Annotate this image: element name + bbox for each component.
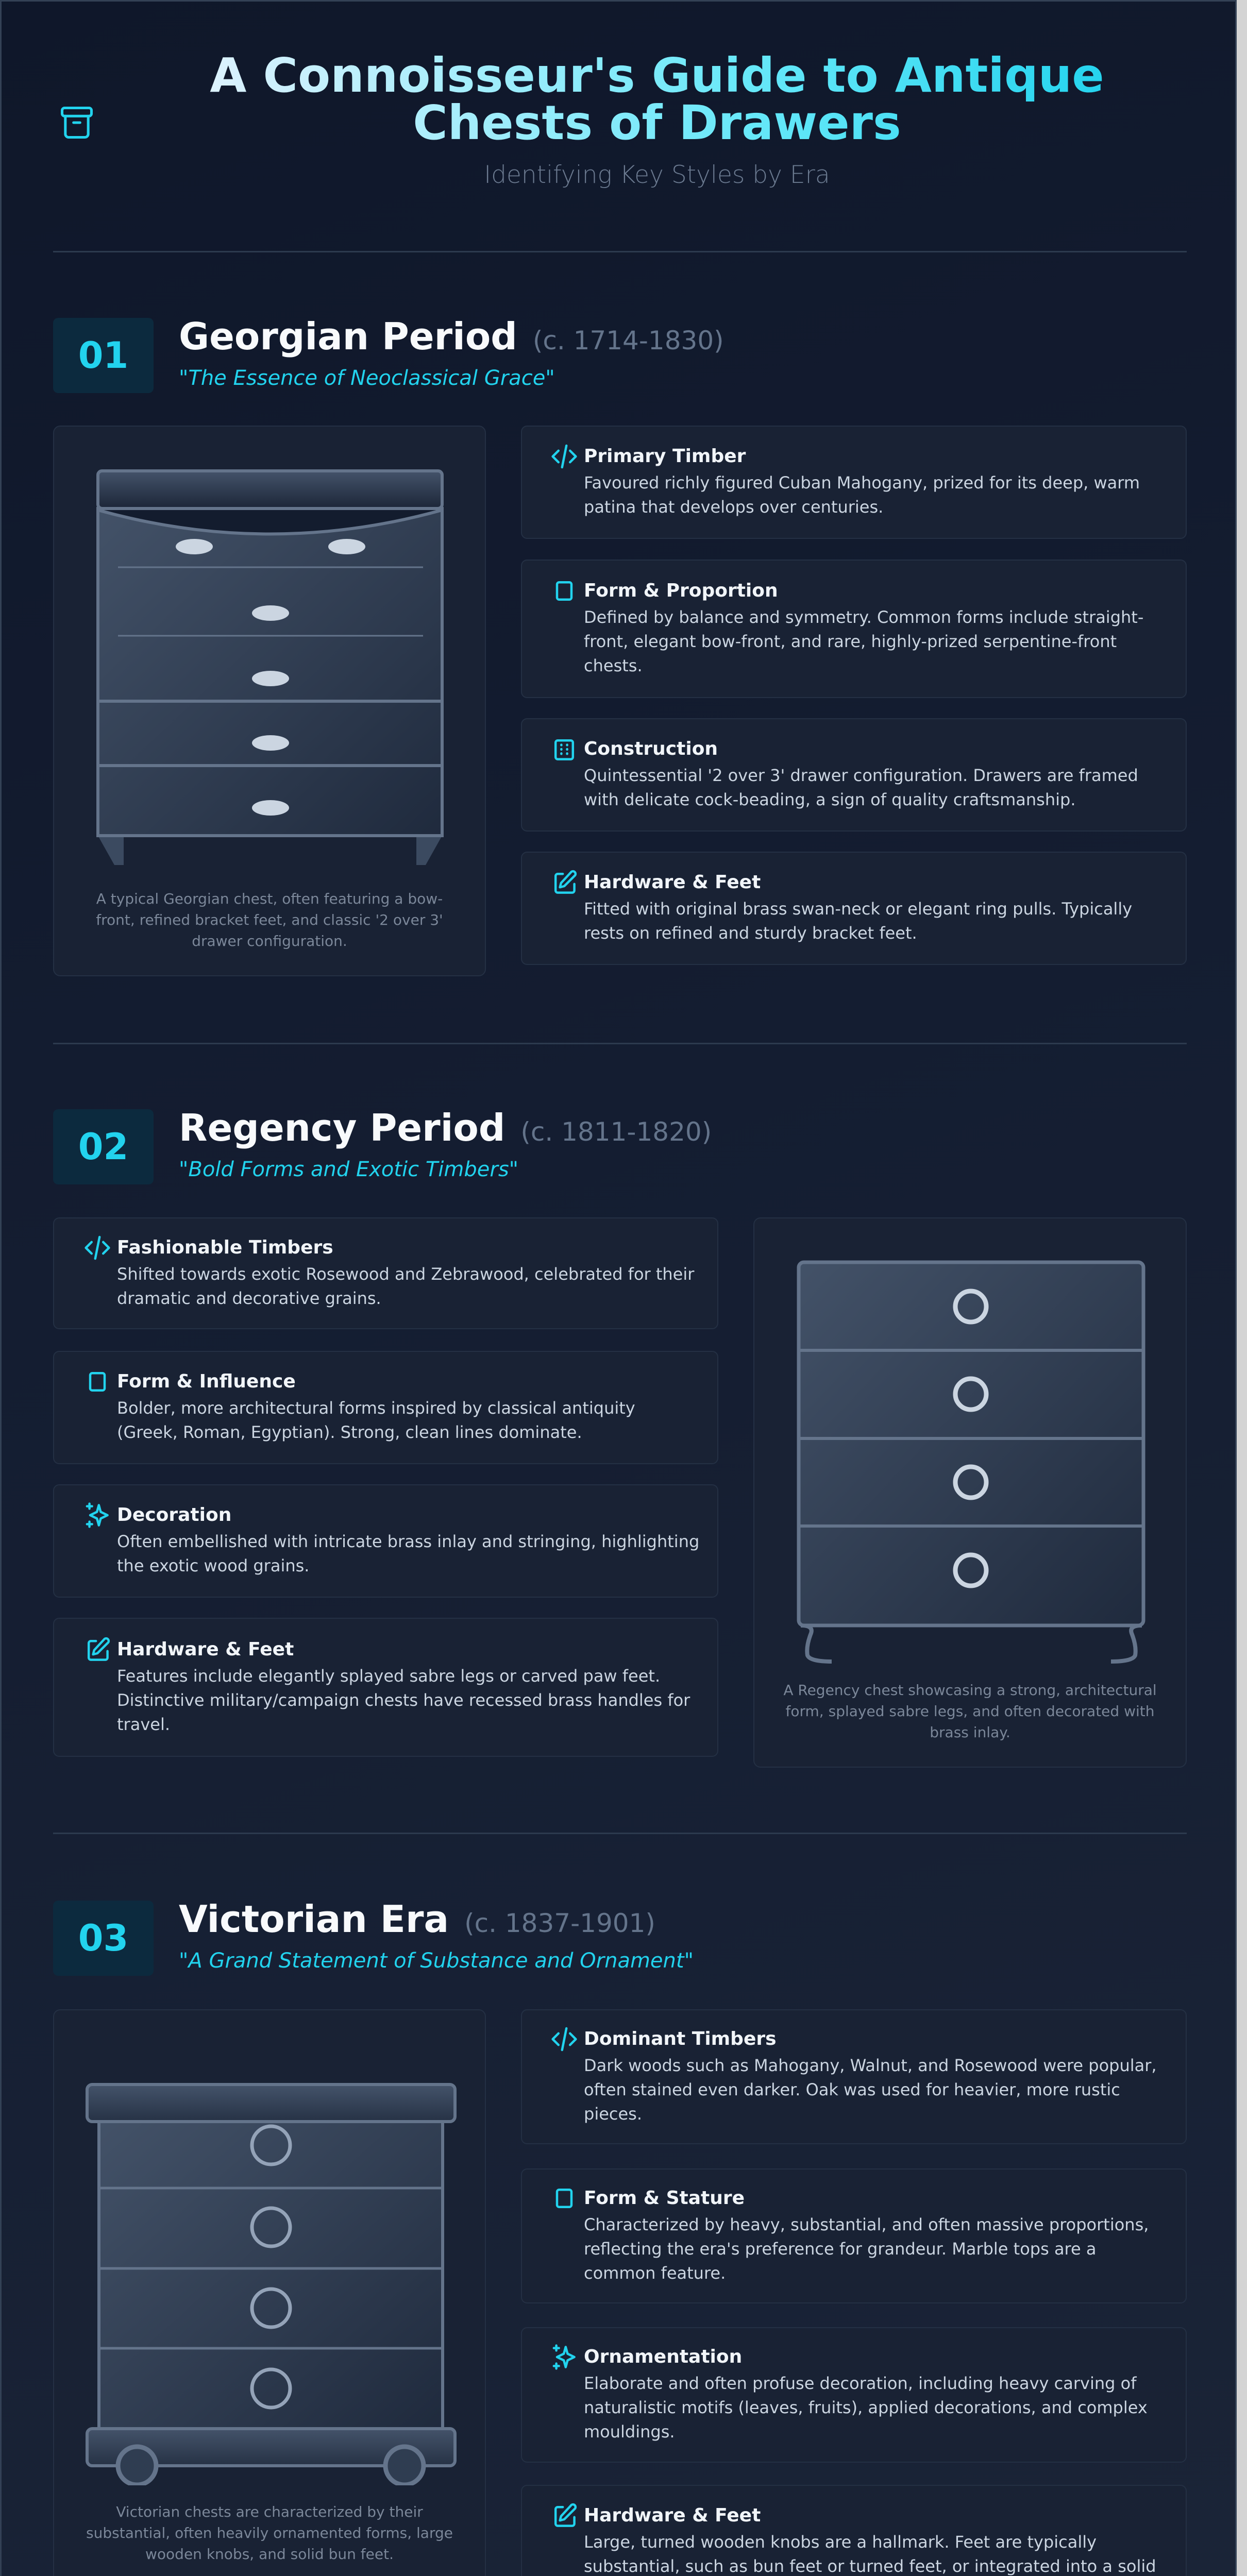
icon: square [555,581,573,601]
section 1 badge: 01 [78,334,128,377]
card: form & stature: common feature. [584,2263,726,2282]
card: ornamentation [521,2327,1187,2463]
card: form & influence: Form & Influence [117,1371,296,1392]
section 3 quote: "A Grand Statement of Substance and Ornament" [179,1949,694,1973]
subtitle: Identifying Key Styles by Era [484,161,830,189]
title: A Connoisseur's Guide to Antique [210,48,1104,103]
icon: edit [550,2501,579,2530]
card: primary timber: Primary Timber [584,446,746,467]
section 2 badge: 02 [78,1126,128,1168]
card: hardware & feet regency: Distinctive military/campaign chests have recessed brass handles for [117,1690,690,1709]
caption: front, refined bracket feet, and classic '2 over 3' [96,911,443,928]
icon: archive box [61,107,93,139]
card: ornamentation: naturalistic motifs (leaves, fruits), applied decorations, and complex [584,2398,1148,2417]
card: form & influence: Bolder, more architectural forms inspired by classical antiquity [117,1398,635,1418]
card: fashionable timbers: dramatic and decorative grains. [117,1288,381,1308]
icon: sparkles [86,1502,109,1528]
card: form & proportion: Defined by balance and symmetry. Common forms include straight- [584,607,1143,627]
card: form & stature [521,2168,1187,2303]
chest illustration: victorian [86,2083,457,2485]
card: dominant timbers: pieces. [584,2104,642,2124]
caption: A typical Georgian chest, often featuring a bow- [96,890,443,907]
card: form & proportion [521,560,1187,698]
section 2 heading: Regency Period (c. 1811-1820) [179,1106,712,1149]
card: fashionable timbers: Fashionable Timbers [117,1236,333,1258]
icon: sparkles [550,2343,579,2371]
chest illustration: georgian [96,469,444,865]
card: hardware & feet: rests on refined and sturdy bracket feet. [584,923,917,943]
section 1 badge [53,318,154,393]
caption: form, splayed sabre legs, and often decorated with [786,1703,1154,1720]
section 2 quote: "Bold Forms and Exotic Timbers" [179,1158,518,1181]
panel: regency chest [753,1217,1187,1768]
card: fashionable timbers: Shifted towards exotic Rosewood and Zebrawood, celebrated for their [117,1264,694,1284]
card: ornamentation: mouldings. [584,2422,675,2442]
card: dominant timbers: Dark woods such as Mahogany, Walnut, and Rosewood were popular, [584,2056,1157,2075]
card: hardware & feet regency [53,1618,718,1757]
card: primary timber: Favoured richly figured Cuban Mahogany, prized for its deep, warm [584,473,1140,493]
card: construction: with delicate cock-beading, a sign of quality craftsmanship. [584,790,1075,809]
card: construction: Quintessential '2 over 3' drawer configuration. Drawers are framed [584,766,1138,785]
caption [96,890,443,950]
card: form & proportion: chests. [584,656,643,675]
section 1 quote: "The Essence of Neoclassical Grace" [179,366,555,390]
section 2 badge [53,1109,154,1184]
caption: Victorian chests are characterized by their [116,2503,423,2520]
panel: georgian chest [53,426,486,976]
card: dominant timbers [521,2009,1187,2144]
icon: code [85,1235,110,1260]
card: form & proportion: Form & Proportion [584,580,778,601]
card: hardware & feet victorian [521,2485,1187,2576]
panel: victorian chest [53,2009,486,2576]
card: hardware & feet regency: Features include elegantly splayed sabre legs or carved paw feet. [117,1666,660,1686]
card: dominant timbers: Dominant Timbers [584,2028,777,2049]
card: dominant timbers: often stained even darker. Oak was used for heavier, more rustic [584,2079,1120,2099]
caption [783,1682,1157,1741]
caption: drawer configuration. [192,933,347,950]
card: form & influence [53,1351,718,1464]
section 3 badge: 03 [78,1917,128,1959]
section 1 heading: Georgian Period (c. 1714-1830) [179,315,724,358]
card: decoration [53,1484,718,1598]
icon: edit [554,870,577,894]
card: primary timber [521,426,1187,539]
card: hardware & feet victorian: Hardware & Feet [584,2505,761,2526]
title: Chests of Drawers [413,95,901,150]
card: hardware & feet: Hardware & Feet [584,872,761,893]
caption: wooden knobs, and solid bun feet. [145,2546,394,2563]
card: hardware & feet [521,852,1187,965]
card: hardware & feet regency: travel. [117,1715,170,1734]
card: form & proportion: front, elegant bow-front, and rare, highly-prized serpentine-front [584,632,1117,651]
card: form & stature: Characterized by heavy, substantial, and often massive proportions, [584,2214,1149,2234]
icon: square [550,2183,579,2212]
card: form & stature: Form & Stature [584,2188,745,2208]
icon: edit [88,1637,110,1661]
card: ornamentation: Elaborate and often profuse decoration, including heavy carving of [584,2374,1136,2393]
card: form & stature: reflecting the era's preference for grandeur. Marble tops are a [584,2239,1096,2259]
card: hardware & feet victorian: Large, turned wooden knobs are a hallmark. Feet are typically [584,2532,1097,2551]
icon: code [551,444,577,469]
section 3 heading: Victorian Era (c. 1837-1901) [179,1897,655,1941]
card: construction: Construction [584,738,718,759]
icon: grid [554,739,574,760]
icon: code [550,2025,579,2054]
icon: square [89,1372,106,1392]
card: fashionable timbers [53,1217,718,1329]
card: decoration: the exotic wood grains. [117,1556,309,1575]
caption: A Regency chest showcasing a strong, architectural [783,1682,1157,1699]
caption: brass inlay. [930,1724,1010,1741]
card: hardware & feet: Fitted with original brass swan-neck or elegant ring pulls. Typically [584,899,1132,919]
card: hardware & feet victorian: substantial, such as bun feet or turned feet, or integrated into a solid [584,2556,1156,2576]
caption: substantial, often heavily ornamented forms, large [86,2524,453,2541]
caption [54,2501,485,2565]
card: form & influence: (Greek, Roman, Egyptian). Strong, clean lines dominate. [117,1422,582,1442]
card: construction [521,718,1187,832]
title [193,52,1121,147]
card: decoration: Often embellished with intricate brass inlay and stringing, highlighting [117,1532,699,1551]
card: decoration: Decoration [117,1504,231,1526]
card: ornamentation: Ornamentation [584,2346,742,2367]
section 3 badge [53,1901,154,1976]
chest illustration: regency [797,1260,1145,1664]
card: hardware & feet regency: Hardware & Feet [117,1638,294,1660]
card: primary timber: patina that develops over centuries. [584,497,883,517]
